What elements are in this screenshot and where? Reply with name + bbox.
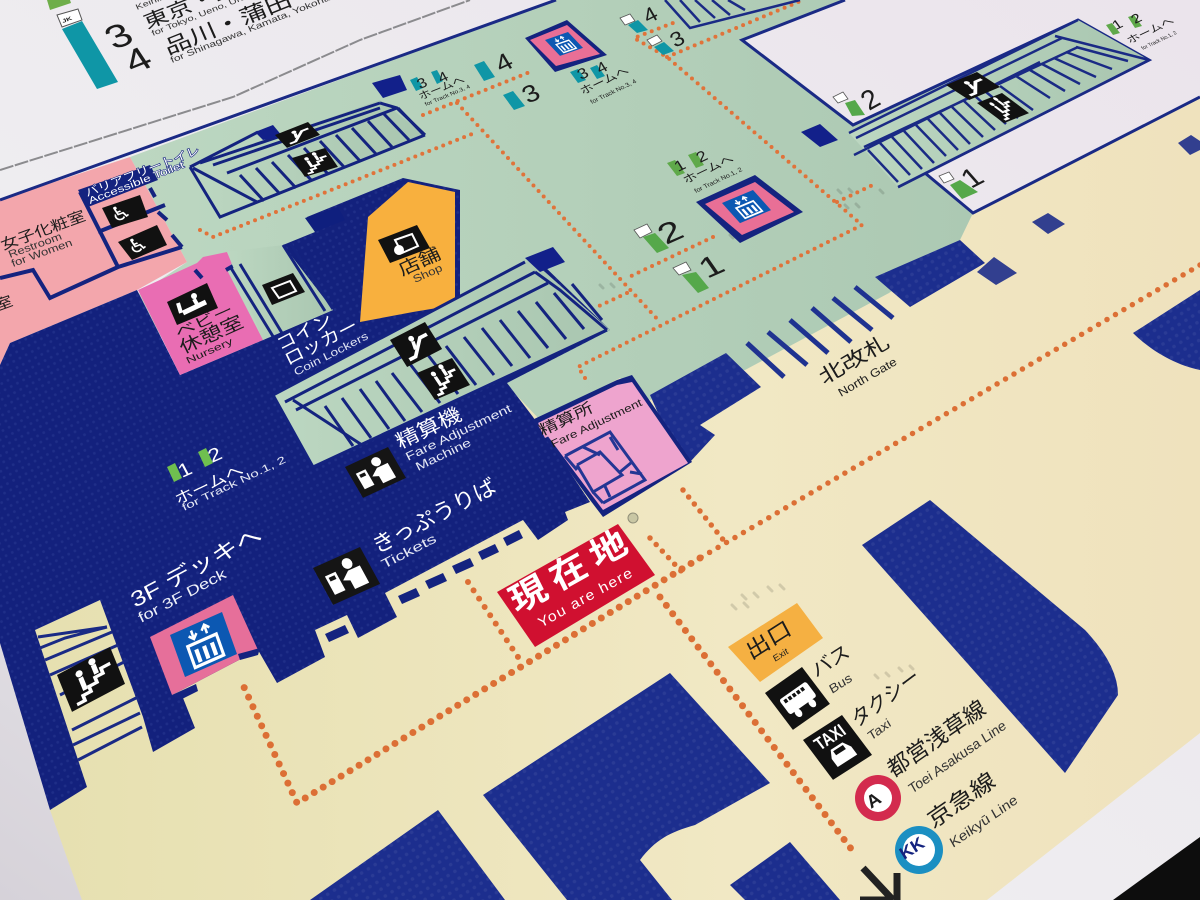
- shop text: 店舗: [395, 244, 444, 280]
- sign: JY track 2: [634, 214, 690, 253]
- label: to track 1,2 on navy: for Track No.1, 2: [180, 455, 288, 513]
- arrow: exit direction: [860, 868, 897, 900]
- icon: elevator: [170, 612, 237, 677]
- label: to track 1,2 on navy: [167, 443, 288, 513]
- label: track 1,2 top right: for Track No.1, 2: [1140, 30, 1179, 51]
- icon: taxi: TAXI: [811, 721, 850, 755]
- sign: JY track 2: 2: [651, 214, 690, 251]
- panel: stairs upper left: [190, 75, 425, 217]
- label: north gate: North Gate: [836, 355, 899, 399]
- map outline: [0, 0, 1200, 213]
- label: you are here: 現在地: [503, 522, 633, 621]
- fare office hatch: [565, 432, 645, 503]
- north gate bars: [747, 287, 893, 377]
- JK badge: [57, 9, 82, 27]
- sign: JK 4 and 3 center: [474, 47, 545, 110]
- sign: JY track 1: 1: [692, 248, 731, 285]
- panel: 3F elevator: [150, 595, 260, 700]
- sign: track 3,4 upper elevator: [525, 20, 607, 72]
- label: bus: [765, 641, 855, 730]
- label: bus: バス: [809, 641, 853, 682]
- track 4 number: 4: [116, 40, 160, 81]
- icon: wheelchair upper: ♿: [106, 200, 136, 228]
- pillar squares: [977, 135, 1200, 285]
- label: Toei Asakusa line: [855, 695, 1009, 821]
- block: lower navy: [310, 810, 505, 900]
- label: Keikyu line: [895, 767, 1020, 874]
- label: exit: Exit: [771, 646, 791, 665]
- block: north gate navy: [875, 240, 985, 307]
- icon: line A: A: [862, 788, 885, 812]
- label: exit: [728, 603, 823, 682]
- sign: JK track 3 top: 3: [666, 26, 689, 52]
- icon: line KK: KK: [896, 833, 928, 863]
- label: track 3,4 center: for Track No.3, 4: [588, 77, 638, 105]
- icon: baby care: [167, 283, 218, 325]
- label: fare adjustment machine: Fare Adjustment: [403, 401, 514, 463]
- floor: green concourse: [130, 0, 1149, 500]
- wall stubs along ticket hall: [325, 530, 523, 642]
- sign: JK 4 and 3 center: 3: [517, 78, 545, 109]
- sign: JK track 4 top: [620, 2, 662, 33]
- sign: JK track 3 top: [647, 26, 689, 55]
- icon: wheelchair lower: [118, 225, 167, 260]
- label: accessible toilet: Accessible Toilet: [87, 160, 186, 206]
- panel: coin locker corridor: [227, 243, 333, 340]
- label: Toei Asakusa line: 都営浅草線: [883, 695, 990, 782]
- label: track 1,2 top right: [1106, 11, 1179, 51]
- icon: elevator: [722, 190, 771, 223]
- nursery text: [172, 301, 247, 366]
- fare office text: 精算所: [536, 399, 596, 439]
- panel: left stairs: [38, 627, 142, 760]
- label: tickets: Tickets: [378, 531, 439, 571]
- label: exit: 出口: [742, 615, 795, 664]
- label: to track 1,2 on navy: 1: [174, 458, 196, 482]
- label: Keikyu line: 京急線: [923, 767, 999, 833]
- label: track 1,2 top right: 1: [1110, 17, 1126, 33]
- green line bar: [47, 0, 71, 10]
- nursery text: 休憩室: [176, 312, 247, 358]
- icon: elevator: [545, 32, 583, 56]
- icon: stairs people: [977, 93, 1029, 123]
- icon: locker: [262, 273, 305, 305]
- label: track 3,4 left: 3: [414, 75, 430, 92]
- icon: shop bag: [378, 225, 430, 263]
- route: orange guide dots on green: [200, 0, 877, 378]
- nursery text: ベビー: [172, 301, 236, 341]
- track 3 number: 3: [97, 16, 141, 57]
- icon: escalator: [275, 122, 320, 148]
- fare office text: Fare Adjustment: [549, 396, 645, 450]
- label: women restroom: [0, 208, 88, 314]
- panel: stairs center: [273, 247, 610, 467]
- teal line bar: [62, 21, 118, 89]
- label: tickets: [313, 474, 500, 605]
- label: track 3,4 left: ホームへ: [417, 74, 467, 102]
- icon: fare machine: [345, 447, 406, 498]
- sign: JY track 1 white block: [939, 162, 991, 199]
- panel: fare office: [532, 353, 761, 517]
- label: track 3,4 left: 4: [435, 69, 452, 86]
- icon: stairs people: [417, 358, 470, 400]
- label: women restroom: 女子化粧室: [0, 208, 88, 253]
- label: track 3,4 center: 3: [574, 64, 592, 83]
- sign: JY track 2 white block: 2: [855, 83, 886, 116]
- label: track 3,4 left: for Track No.3, 4: [424, 84, 472, 108]
- label: tickets: きっぷうりば: [368, 474, 500, 558]
- tactile point: [628, 513, 638, 523]
- panel: stairs right: [801, 20, 1149, 187]
- label: fare adjustment machine: Machine: [413, 435, 473, 473]
- icon: stairs people: [292, 148, 338, 177]
- block: right large navy: [862, 500, 1118, 773]
- label: track 1,2 center: [667, 147, 744, 194]
- label: taxi: [803, 664, 923, 780]
- label: track 1,2 center: ホームへ: [680, 153, 736, 186]
- label: 3F deck: for 3F Deck: [136, 566, 229, 626]
- label: 3F deck: 3F デッキへ: [127, 522, 265, 612]
- icon: bus: [765, 667, 830, 730]
- label: fare adjustment machine: [345, 401, 514, 498]
- label: women restroom: Restroom: [7, 231, 64, 260]
- panel: center elevator track 1,2: [696, 175, 803, 243]
- label: to track 1,2 on navy: 2: [204, 443, 226, 467]
- icon: ticket machine: [313, 547, 380, 605]
- label: coin lockers: ロッカー: [282, 316, 361, 370]
- floor: pink restrooms: [0, 157, 187, 365]
- sign: JK 4 and 3 center: 4: [490, 47, 518, 78]
- label: accessible toilet: バリアフリートイレ: [83, 144, 201, 199]
- label: you are here: You are here: [536, 565, 635, 631]
- block: center navy: [483, 673, 770, 900]
- label: track 1,2 center: for Track No.1, 2: [692, 166, 744, 194]
- label: you are here: [497, 522, 655, 647]
- label: track 3,4 center: [570, 58, 638, 105]
- panel: legend header: [47, 0, 371, 89]
- route: orange guide dots on cream: [243, 265, 1200, 850]
- label: women restroom: for Women: [10, 237, 74, 269]
- panel: nursery: [138, 252, 263, 375]
- label: track 1,2 center: 1: [671, 156, 689, 175]
- label: fare adjustment machine: 精算機: [392, 403, 465, 453]
- icon: escalator: [946, 72, 1000, 100]
- icon: walking stairs: [57, 647, 125, 712]
- navy wall: main block: [0, 178, 610, 810]
- dark table corner: [1113, 837, 1200, 900]
- panel: shop: [360, 182, 455, 322]
- panel: restroom interior walls: [0, 165, 345, 298]
- label: Toei Asakusa line: Toei Asakusa Line: [906, 718, 1009, 797]
- label: track 3,4 left: [410, 69, 472, 108]
- icon: line A: [855, 775, 901, 821]
- icon: wheelchair lower: ♿: [123, 232, 153, 260]
- icon: wheelchair upper: [102, 195, 148, 228]
- label: taxi: タクシー: [848, 664, 923, 732]
- JK badge: JK: [61, 16, 73, 24]
- nursery text: Nursery: [184, 336, 235, 366]
- label: coin lockers: コイン: [274, 310, 335, 355]
- label: track 1,2 top right: ホームへ: [1124, 16, 1177, 46]
- label: bus: Bus: [827, 670, 855, 697]
- label: track 3,4 center: ホームへ: [577, 65, 631, 97]
- label: track 1,2 center: 2: [693, 147, 711, 166]
- stairs top fragment: [665, 0, 800, 28]
- shop text: Shop: [411, 261, 445, 285]
- sign: JY track 1: [673, 248, 731, 293]
- block: bottom navy: [730, 842, 840, 900]
- label: track 1,2 top right: 2: [1129, 11, 1145, 27]
- sign: JY track 1 white block: 1: [954, 162, 991, 194]
- block: far right navy: [1133, 290, 1200, 370]
- label: coin lockers: Coin Lockers: [292, 329, 370, 378]
- label: north gate: 北改札: [815, 330, 893, 389]
- sign: JY track 2 white block: [833, 83, 886, 116]
- icon: escalator: [390, 322, 442, 367]
- label: track 3,4 center: 4: [593, 58, 611, 77]
- sign: JK track 4 top: 4: [639, 2, 662, 28]
- label: Keikyu line: Keikyū Line: [947, 792, 1020, 851]
- label: to track 1,2 on navy: ホームへ: [172, 461, 246, 508]
- label: taxi: Taxi: [865, 716, 893, 743]
